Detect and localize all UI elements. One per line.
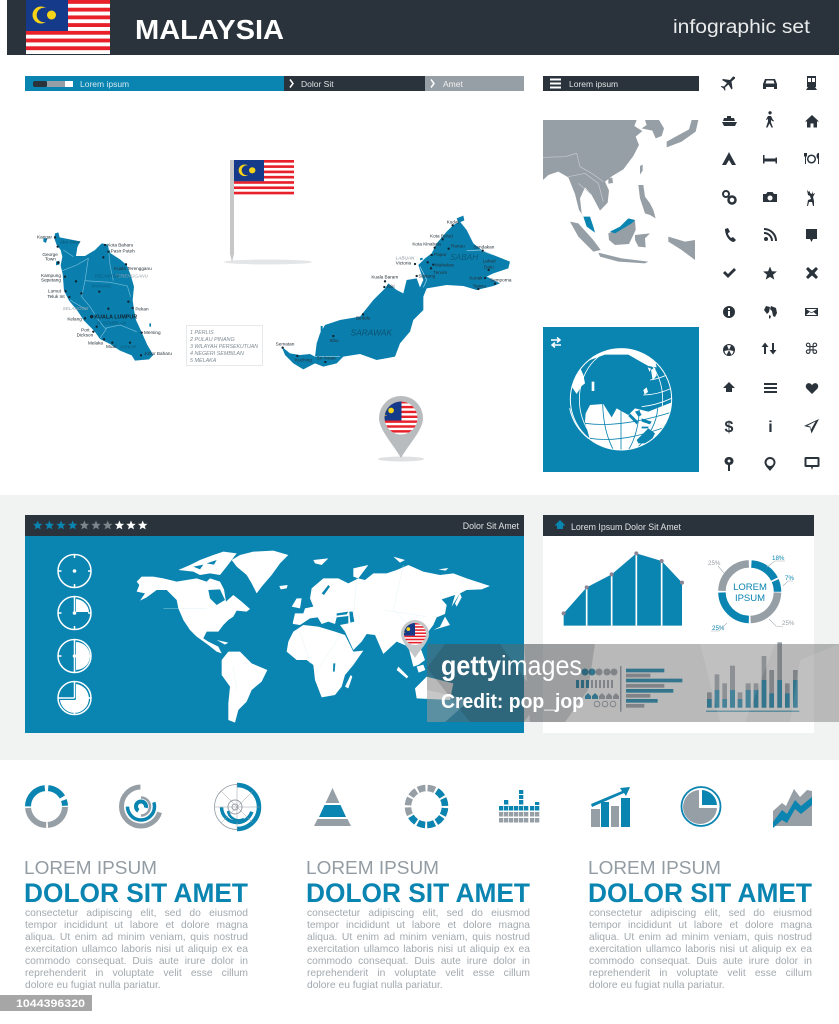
pictogram rows xyxy=(576,668,619,707)
icon: camera xyxy=(763,192,777,202)
map: Peninsular Malaysia: PAHANG xyxy=(92,284,111,289)
watermark text: gettyimages xyxy=(441,650,582,681)
icon: deer xyxy=(807,190,815,206)
icon: gears xyxy=(723,191,736,204)
icon: plane xyxy=(721,76,735,91)
map: East Malaysia: Kunak xyxy=(469,275,483,280)
flag on pole xyxy=(224,160,312,264)
body text: column 2: aliqua. Ut enim ad minim veniam, quis nostrud xyxy=(307,932,530,943)
icon: growth bars with arrow xyxy=(591,787,630,827)
map: Peninsular Malaysia: Pekan xyxy=(135,307,149,312)
map: East Malaysia xyxy=(276,216,512,369)
donut chart: 25% xyxy=(712,625,725,632)
body text: column 3: commodo consequat. Duis aute irure dolor in xyxy=(589,956,812,967)
map: Peninsular Malaysia: Melaka xyxy=(88,340,103,345)
body text: column 1 xyxy=(25,908,248,991)
donut chart: 25% xyxy=(782,620,795,627)
map: East Malaysia: Kota Kinabalu xyxy=(412,242,442,247)
map: Peninsular Malaysia: Kelang xyxy=(67,316,82,321)
map: East Malaysia: Lahad xyxy=(483,259,496,264)
icon: pie xyxy=(682,787,720,826)
map: Peninsular Malaysia: Port xyxy=(81,327,90,332)
map: Peninsular Malaysia: Town xyxy=(45,257,56,262)
icon: dollar: $ xyxy=(725,419,734,436)
body text: column 1: reprehenderit in voluptate velit esse cillum xyxy=(25,968,248,979)
body text: column 3: exercitation ullamco laboris nisi ut aliquip ex ea xyxy=(589,944,812,955)
panel: world map xyxy=(25,515,524,733)
heading: column 2 xyxy=(306,857,530,908)
grey band xyxy=(0,495,839,760)
body text: column 3 xyxy=(589,908,812,991)
panel title: Lorem Ipsum Dolor Sit Amet xyxy=(571,522,682,532)
map: Peninsular Malaysia: Kota Baharu xyxy=(107,242,134,247)
header: lorem ipsum side xyxy=(543,76,699,91)
map: East Malaysia: LABUAN xyxy=(396,255,415,260)
icon: train xyxy=(806,76,817,90)
body text: column 1: tempor incididunt ut labore et dolore magna xyxy=(25,920,248,931)
map: East Malaysia: Sipitang xyxy=(418,274,436,279)
icon: walker xyxy=(766,111,774,128)
subtitle: infographic set xyxy=(673,17,811,38)
donut chart: 25% xyxy=(708,560,721,567)
map: East Malaysia: Sematan xyxy=(276,341,295,346)
map: Peninsular Malaysia: Kampung xyxy=(41,273,61,278)
icon: ship xyxy=(722,116,737,126)
map: Peninsular Malaysia: Mersing xyxy=(144,330,161,335)
map: Peninsular Malaysia: KELANTAN xyxy=(95,274,120,279)
map: East Malaysia: Sri Aman xyxy=(317,355,336,360)
heading: column 1 xyxy=(24,857,248,908)
heading: column 3: DOLOR SIT AMET xyxy=(588,878,812,908)
star rating xyxy=(33,520,147,529)
body text: column 3: dolore eu fugiat nulla pariatur. xyxy=(589,980,725,991)
column chart xyxy=(706,642,799,712)
body text: column 3: reprehenderit in voluptate velit esse cillum xyxy=(589,968,812,979)
donut chart: 18% xyxy=(772,555,785,562)
chart icons row xyxy=(28,781,812,832)
icon: pyramid xyxy=(314,788,351,826)
map pin with flag xyxy=(378,396,424,462)
icon: bars of squares xyxy=(499,790,539,822)
body text: column 1: commodo consequat. Duis aute irure dolor in xyxy=(25,956,248,967)
map: East Malaysia: Ranau xyxy=(451,243,465,248)
legend box: 2 PULAU PINANG xyxy=(189,337,235,343)
heading: column 2: DOLOR SIT AMET xyxy=(306,878,530,908)
map: Southeast Asia locator xyxy=(543,120,698,263)
icon: pin small xyxy=(724,457,734,471)
icon: rss xyxy=(764,229,776,241)
map: East Malaysia: Kota Belud xyxy=(430,233,453,238)
title: MALAYSIA xyxy=(135,14,284,45)
icon: command: ⌘ xyxy=(804,340,819,358)
body text: column 3: consectetur adipiscing elit, sed do eiusmod xyxy=(589,908,812,919)
legend box: 3 WILAYAH PERSEKUTUAN xyxy=(190,344,258,350)
map: Peninsular Malaysia: SELANGOR xyxy=(63,306,89,311)
icon: mail xyxy=(805,308,818,316)
icon: message box xyxy=(804,457,820,470)
icon: menu xyxy=(764,383,777,393)
map: East Malaysia: Miri xyxy=(387,284,394,289)
icon: cross xyxy=(806,267,818,279)
body text: column 1: exercitation ullamco laboris nisi ut aliquip ex ea xyxy=(25,944,248,955)
icon: check xyxy=(723,268,736,278)
map: East Malaysia: Semporna xyxy=(490,277,512,282)
icon: up arrow xyxy=(723,382,735,392)
icon: letter i: i xyxy=(768,419,773,436)
header: lorem ipsum side: Lorem ipsum xyxy=(569,79,618,89)
image id tag xyxy=(0,995,92,1011)
donut chart xyxy=(708,555,795,632)
body text: column 2: exercitation ullamco laboris nisi ut aliquip ex ea xyxy=(307,944,530,955)
map: Peninsular Malaysia: TERENGGANU xyxy=(115,273,148,278)
icon: segmented ring xyxy=(401,781,452,832)
map: Peninsular Malaysia: Pasir Puteh xyxy=(111,248,135,253)
icon: house xyxy=(805,115,819,128)
icon: info xyxy=(723,306,735,318)
icon: fork and plate xyxy=(804,153,819,164)
map: East Malaysia: Papar xyxy=(434,252,447,257)
donut chart: LOREM xyxy=(733,582,767,593)
map: East Malaysia: Kuala Baram xyxy=(371,275,398,280)
panel: globe xyxy=(543,327,699,472)
body text: column 2 xyxy=(307,908,530,991)
body text: column 2: dolore eu fugiat nulla pariatur. xyxy=(307,980,443,991)
body text: column 2: reprehenderit in voluptate velit esse cillum xyxy=(307,968,530,979)
icon: radar arcs xyxy=(214,784,260,830)
map: Peninsular Malaysia: JOHOR xyxy=(119,345,137,350)
horizontal bar chart xyxy=(620,666,682,712)
donut chart: IPSUM xyxy=(735,593,765,604)
icon: radiation xyxy=(723,344,735,356)
tab bar: Lorem ipsum xyxy=(80,79,129,89)
map: Peninsular Malaysia xyxy=(37,232,172,361)
map: Peninsular Malaysia: Johor Baharu xyxy=(144,351,172,356)
world map xyxy=(137,551,490,723)
heading: column 3 xyxy=(588,857,812,908)
heading: column 1: LOREM IPSUM xyxy=(24,857,157,878)
panel: charts xyxy=(543,515,814,733)
icon: speech pin xyxy=(806,229,817,242)
legend box: 5 MELAKA xyxy=(190,358,217,364)
heading: column 2: LOREM IPSUM xyxy=(306,857,439,878)
icon: up arrow xyxy=(554,520,566,529)
tab bar: Dolor Sit xyxy=(301,79,334,89)
legend box: 1 PERLIS xyxy=(190,330,214,336)
icon: heart xyxy=(806,383,818,394)
tab bar: Amet xyxy=(443,79,463,89)
body text: column 1: dolore eu fugiat nulla pariatur. xyxy=(25,980,161,991)
map: East Malaysia: Datu xyxy=(484,264,494,269)
map: Peninsular Malaysia: KUALA LUMPUR xyxy=(94,315,137,321)
body text: column 3: aliqua. Ut enim ad minim veniam, quis nostrud xyxy=(589,932,812,943)
icon: bed xyxy=(763,155,777,164)
icon: world xyxy=(764,306,777,319)
map: East Malaysia: Tawau xyxy=(473,283,487,288)
icon: phone xyxy=(725,228,736,242)
map: East Malaysia: Kuching xyxy=(295,357,312,362)
body text: column 3: tempor incididunt ut labore et dolore magna xyxy=(589,920,812,931)
icon: car xyxy=(763,79,777,89)
map: East Malaysia: Sibu xyxy=(329,338,339,343)
flag: Malaysia header xyxy=(26,0,110,54)
map: Peninsular Malaysia: Teluk Int xyxy=(47,294,65,299)
area chart xyxy=(562,551,684,626)
map: Peninsular Malaysia: Dickson xyxy=(77,332,94,337)
body text: column 1: aliqua. Ut enim ad minim veniam, quis nostrud xyxy=(25,932,248,943)
map: Peninsular Malaysia: Muar xyxy=(106,344,117,349)
map: East Malaysia: SARAWAK xyxy=(351,327,392,337)
clock icons xyxy=(58,554,92,714)
body text: column 2: consectetur adipiscing elit, sed do eiusmod xyxy=(307,908,530,919)
heading: column 1: DOLOR SIT AMET xyxy=(24,878,248,908)
map: Peninsular Malaysia: Lumut xyxy=(48,288,62,293)
credit text: Credit: pop_jop xyxy=(441,691,584,713)
map: Peninsular Malaysia: Sepetang xyxy=(41,277,61,282)
legend box: 4 NEGERI SEMBILAN xyxy=(190,351,244,357)
tab bar xyxy=(25,76,524,91)
panel title: Dolor Sit Amet xyxy=(463,521,520,531)
map: Peninsular Malaysia: N. SEMBILAN xyxy=(97,321,127,326)
icon: star xyxy=(763,266,777,280)
icon: spiral rings xyxy=(122,787,160,826)
map: East Malaysia: Bintulu xyxy=(356,315,371,320)
map: Peninsular Malaysia: George xyxy=(42,252,58,257)
icon: up down arrows xyxy=(762,342,776,354)
map pin on world map xyxy=(401,620,429,658)
body text: column 2: tempor incididunt ut labore et dolore magna xyxy=(307,920,530,931)
image id tag: 1044396320 xyxy=(16,998,85,1010)
map: East Malaysia: SABAH xyxy=(450,252,479,262)
icon grid xyxy=(721,76,820,471)
legend box xyxy=(186,326,262,366)
body text: column 2: commodo consequat. Duis aute irure dolor in xyxy=(307,956,530,967)
map: Peninsular Malaysia: Kuala Terengganu xyxy=(114,266,152,271)
icon: navigation arrow xyxy=(804,419,819,434)
map: East Malaysia: Kudat xyxy=(447,219,460,224)
heading: column 3: LOREM IPSUM xyxy=(588,857,721,878)
icon: tent xyxy=(722,152,736,165)
icon: segmented donut xyxy=(28,788,65,825)
map: East Malaysia: Sandakan xyxy=(473,245,495,250)
donut chart: 7% xyxy=(785,575,794,582)
map: East Malaysia: Mahakan xyxy=(435,262,455,267)
icon: pin large xyxy=(764,457,776,471)
header bar xyxy=(7,0,839,55)
body text: column 1: consectetur adipiscing elit, sed do eiusmod xyxy=(25,908,248,919)
map: Peninsular Malaysia: Alor Setar xyxy=(60,240,81,245)
map: Peninsular Malaysia: Kangar xyxy=(37,235,52,240)
watermark overlay xyxy=(427,644,839,722)
map: East Malaysia: Tenom xyxy=(433,270,447,275)
icon: area chart xyxy=(773,789,812,828)
map: East Malaysia: Victoria xyxy=(396,260,412,265)
icon: globe xyxy=(569,348,672,450)
